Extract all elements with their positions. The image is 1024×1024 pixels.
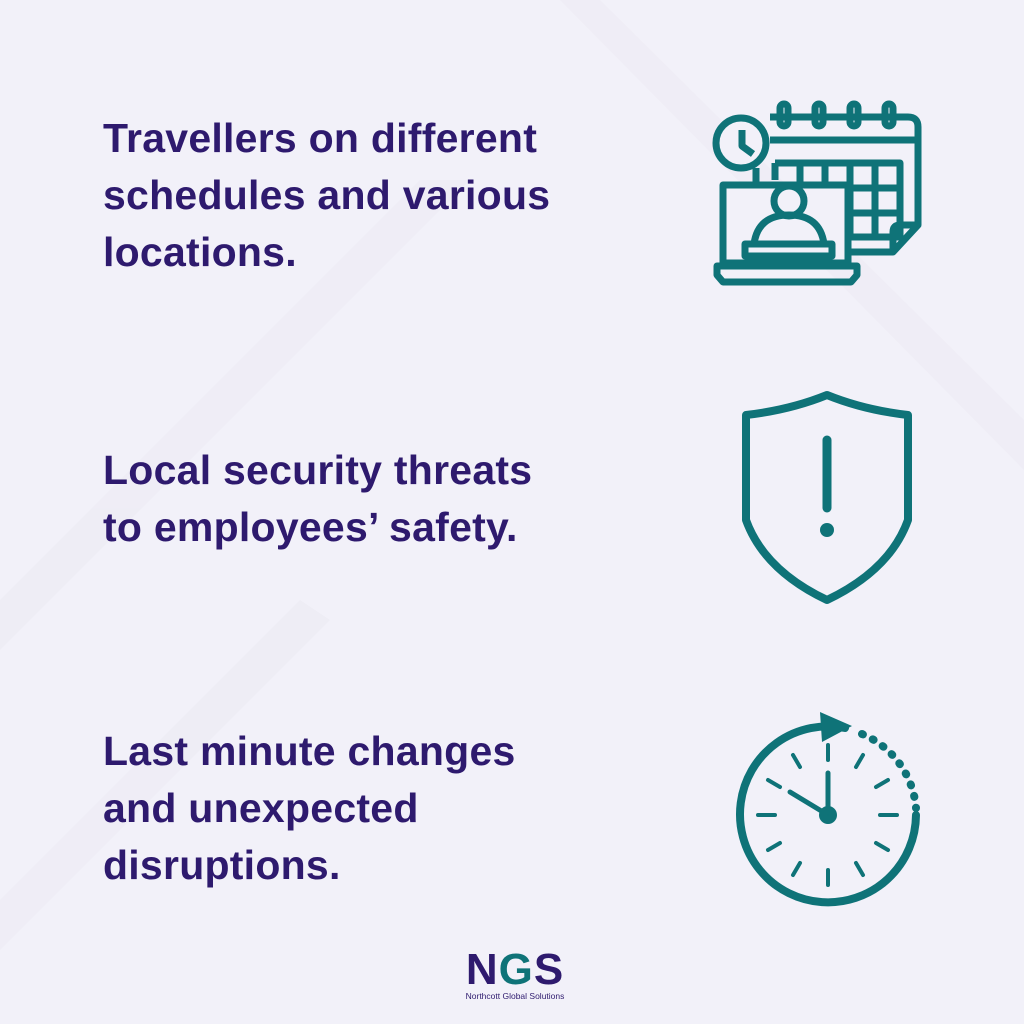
text block 1: locations. (103, 229, 297, 275)
logo: NGS: Northcott Global Solutions (466, 991, 564, 1001)
text block 3: Last minute changes (103, 728, 516, 774)
text block 3 (103, 728, 516, 888)
text block 2 (103, 447, 532, 550)
text block 1: Travellers on different (103, 115, 537, 161)
text block 1: schedules and various (103, 172, 550, 218)
text block 3: and unexpected (103, 785, 419, 831)
text block 1 (103, 115, 550, 275)
text block 3: disruptions. (103, 842, 341, 888)
text block 2: to employees’ safety. (103, 504, 518, 550)
logo: NGS: NGS (466, 945, 564, 994)
text block 2: Local security threats (103, 447, 532, 493)
